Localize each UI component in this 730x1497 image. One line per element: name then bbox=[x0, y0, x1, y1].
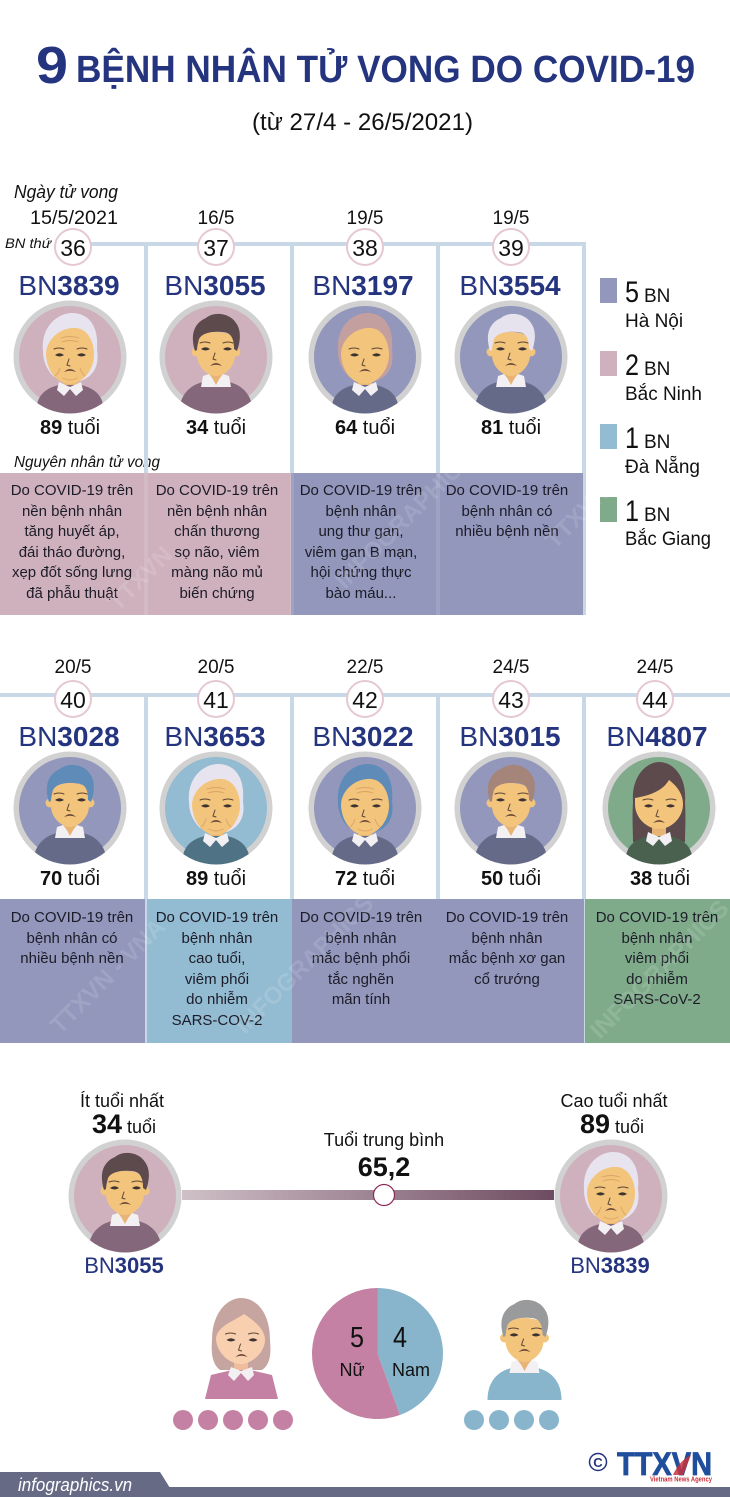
gender pie chart: 5 bbox=[350, 1322, 364, 1354]
average age: 65,2 bbox=[358, 1152, 410, 1182]
panel: cause BN3028 bbox=[0, 899, 145, 1043]
gender pie chart: 4 bbox=[393, 1322, 407, 1354]
watermarks: TTXVN bbox=[103, 542, 178, 616]
patient card 37: 34 tuổi bbox=[186, 417, 246, 439]
panel: cause BN3055: nền bệnh nhân bbox=[167, 503, 267, 520]
watermarks: INFOGRAPHICS bbox=[330, 445, 479, 594]
oldest patient: Cao tuổi nhất bbox=[560, 1091, 668, 1111]
youngest patient bbox=[68, 1091, 182, 1278]
gender pie chart: Nam bbox=[392, 1360, 430, 1380]
patient card 40: 20/5 bbox=[55, 657, 91, 678]
panel: cause BN3839: đã phẫu thuật bbox=[26, 585, 119, 602]
panel: cause BN3022: Do COVID-19 trên bbox=[300, 909, 422, 926]
patient card 43: BN3015 bbox=[459, 721, 561, 752]
panel: cause BN3197: bào máu... bbox=[326, 585, 396, 602]
legend item: Bắc Giang: BN bbox=[644, 505, 670, 526]
age bar bbox=[182, 1190, 554, 1200]
panel: cause BN3197: ung thư gan, bbox=[318, 523, 404, 540]
youngest patient: Ít tuổi nhất bbox=[80, 1091, 164, 1111]
patient card 38: 64 tuổi bbox=[335, 417, 395, 439]
panel: cause BN4807: bệnh nhân bbox=[622, 930, 692, 947]
patient card 37: BN3055 bbox=[164, 270, 266, 301]
patient card 41: BN3653 bbox=[164, 721, 266, 752]
panel: cause BN3055: sọ não, viêm bbox=[174, 544, 260, 561]
patient card 43: 50 tuổi bbox=[481, 868, 541, 890]
cause panels row 1 bbox=[0, 242, 586, 615]
panel: cause BN3022 bbox=[292, 899, 438, 1043]
patient card 37 bbox=[160, 208, 272, 439]
logo: TTXVN: TTXVN bbox=[617, 1446, 712, 1482]
legend item: Đà Nẵng: 1 bbox=[625, 422, 639, 455]
average age bbox=[324, 1130, 444, 1182]
panel: cause BN3028: nhiều bệnh nền bbox=[20, 950, 124, 967]
gender pie chart: Nữ bbox=[339, 1360, 365, 1380]
panel: cause BN3055: chấn thương bbox=[174, 523, 260, 540]
legend item: Bắc Ninh: 2 bbox=[625, 349, 639, 382]
panel: cause BN3653: cao tuổi, bbox=[189, 950, 245, 967]
patient card 36: 15/5/2021 bbox=[30, 208, 118, 229]
panel: cause BN4807: do nhiễm bbox=[626, 971, 688, 988]
legend item: Đà Nẵng: BN bbox=[644, 432, 670, 453]
panel: cause BN3839: tăng huyết áp, bbox=[24, 523, 120, 540]
panel: cause BN3028: bệnh nhân có bbox=[27, 930, 117, 947]
oldest patient bbox=[554, 1091, 668, 1278]
patient card 42: 72 tuổi bbox=[335, 868, 395, 890]
logo: TTXVN: C bbox=[593, 1455, 603, 1470]
panel: cause BN3653 bbox=[147, 899, 292, 1043]
panel: cause BN3197: bệnh nhân bbox=[326, 503, 396, 520]
legend item: Hà Nội: Hà Nội bbox=[625, 311, 683, 332]
patient card 44: 24/5 bbox=[637, 657, 673, 678]
panel: cause BN3839: đái tháo đường, bbox=[19, 544, 125, 561]
male count dots bbox=[464, 1410, 559, 1430]
panel: cause BN3197: Do COVID-19 trên bbox=[300, 482, 422, 499]
logo: TTXVN: Vietnam News Agency bbox=[650, 1474, 713, 1484]
panel: cause BN3554 bbox=[437, 473, 583, 615]
patient card 38 bbox=[308, 208, 422, 439]
patient card 42: 22/5 bbox=[347, 657, 383, 678]
patient card 40: BN3028 bbox=[18, 721, 120, 752]
oldest patient: 89 tuổi bbox=[580, 1109, 644, 1139]
patient card 36 bbox=[14, 208, 126, 439]
patient card 44: 44 bbox=[642, 687, 668, 713]
panel: cause BN3197: hội chứng thực bbox=[311, 564, 412, 581]
gender pie chart bbox=[312, 1288, 443, 1419]
panel: cause BN3839 bbox=[0, 473, 145, 615]
icon: female patient bbox=[205, 1298, 278, 1399]
legend item: Bắc Ninh: Bắc Ninh bbox=[625, 383, 702, 405]
legend item: Bắc Giang: Bắc Giang bbox=[625, 528, 711, 550]
panel: cause BN3055: biến chứng bbox=[179, 585, 255, 602]
oldest patient: BN3839 bbox=[570, 1253, 650, 1278]
axis caption: date of death: Ngày tử vong bbox=[14, 182, 118, 202]
panel: cause BN3055: màng não mủ bbox=[171, 564, 263, 581]
patient card 36: BN3839 bbox=[18, 270, 120, 301]
panel: cause BN3022: tắc nghẽn bbox=[328, 971, 394, 988]
age range chart bbox=[68, 1091, 668, 1278]
panel: cause BN3028: Do COVID-19 trên bbox=[11, 909, 133, 926]
patient card 42: BN3022 bbox=[312, 721, 414, 752]
watermarks: INFOGRAPHICS bbox=[230, 890, 379, 1039]
patient card 42: 42 bbox=[352, 687, 378, 713]
female count dots bbox=[173, 1410, 293, 1430]
panel: cause BN3653: bệnh nhân bbox=[182, 930, 252, 947]
legend item: Đà Nẵng: Đà Nẵng bbox=[625, 457, 700, 478]
panel: cause BN3022: mắc bệnh phổi bbox=[312, 950, 410, 967]
patient card 39: 39 bbox=[498, 235, 524, 261]
patient card 41 bbox=[160, 657, 272, 890]
cause panels row 2 bbox=[0, 693, 730, 1043]
panel: cause BN3653: do nhiễm bbox=[186, 991, 248, 1008]
panel: cause BN3015 bbox=[438, 899, 584, 1043]
panel: cause BN3197 bbox=[291, 473, 437, 615]
average marker bbox=[374, 1184, 394, 1206]
panel: cause BN3653: Do COVID-19 trên bbox=[156, 909, 278, 926]
patient card 38: 38 bbox=[352, 235, 378, 261]
icon: male patient bbox=[488, 1300, 562, 1400]
youngest patient: 34 tuổi bbox=[92, 1109, 156, 1139]
patient card 40 bbox=[14, 657, 126, 890]
panel: cause BN4807: SARS-CoV-2 bbox=[613, 991, 701, 1008]
panel: cause BN4807: Do COVID-19 trên bbox=[596, 909, 718, 926]
axis caption: patient order: BN thứ bbox=[5, 235, 52, 251]
panel: cause BN3554: Do COVID-19 trên bbox=[446, 482, 568, 499]
panel: cause BN3015: cổ trướng bbox=[474, 971, 540, 988]
panel: cause BN3015: mắc bệnh xơ gan bbox=[449, 950, 565, 967]
patient card 43: 43 bbox=[498, 687, 524, 713]
patient card 41: 20/5 bbox=[198, 657, 234, 678]
patient card 39: 19/5 bbox=[493, 208, 529, 229]
panel: cause BN3015: bệnh nhân bbox=[472, 930, 542, 947]
panel: cause BN3554: bệnh nhân có bbox=[462, 503, 552, 520]
patient card 41: 41 bbox=[203, 687, 229, 713]
patient card 37: 37 bbox=[203, 235, 229, 261]
patient card 36: 89 tuổi bbox=[40, 417, 100, 439]
patient card 39 bbox=[454, 208, 568, 439]
patient card 44: 38 tuổi bbox=[630, 868, 690, 890]
legend item: Bắc Giang bbox=[600, 495, 711, 550]
panel: cause BN3055 bbox=[145, 473, 291, 615]
title: BỆNH NHÂN TỬ VONG DO COVID-19 bbox=[76, 47, 695, 91]
legend item: Bắc Giang: 1 bbox=[625, 495, 639, 528]
panel: cause BN3022: bệnh nhân bbox=[326, 930, 396, 947]
patient card 44: BN4807 bbox=[606, 721, 708, 752]
panel: cause BN4807: viêm phổi bbox=[625, 950, 689, 967]
youngest patient: BN3055 bbox=[84, 1253, 164, 1278]
patient card 43: 24/5 bbox=[493, 657, 529, 678]
panel: cause BN4807 bbox=[585, 899, 730, 1043]
subtitle: date range: (từ 27/4 - 26/5/2021) bbox=[252, 109, 473, 136]
panel: cause BN3839: nền bệnh nhân bbox=[22, 503, 122, 520]
watermarks: TTXVN - VNA bbox=[45, 914, 171, 1039]
panel: cause BN3653: SARS-COV-2 bbox=[172, 1012, 262, 1029]
panel: cause BN3055: Do COVID-19 trên bbox=[156, 482, 278, 499]
footer band: infographics.vn bbox=[18, 1475, 132, 1495]
title: 9 bbox=[36, 37, 68, 95]
legend bbox=[600, 276, 711, 550]
panel: cause BN3653: viêm phổi bbox=[185, 971, 249, 988]
patient card 40: 70 tuổi bbox=[40, 868, 100, 890]
panel: cause BN3022: mãn tính bbox=[332, 991, 390, 1008]
axis caption: cause of death: Nguyên nhân tử vong bbox=[14, 454, 160, 471]
patient card 42 bbox=[308, 657, 422, 890]
watermarks bbox=[45, 445, 730, 1044]
logo: TTXVN bbox=[590, 1446, 713, 1484]
patient card 37: 16/5 bbox=[198, 208, 234, 229]
panel: cause BN3839: xẹp đốt sống lưng bbox=[12, 564, 132, 581]
title bbox=[36, 37, 695, 95]
panel: cause BN3197: viêm gan B mạn, bbox=[305, 544, 417, 561]
legend item: Bắc Ninh: BN bbox=[644, 359, 670, 380]
average age: Tuổi trung bình bbox=[324, 1130, 444, 1150]
patient card 39: BN3554 bbox=[459, 270, 561, 301]
patient card 36: 36 bbox=[60, 235, 86, 261]
legend item: Đà Nẵng bbox=[600, 422, 700, 478]
patient card 41: 89 tuổi bbox=[186, 868, 246, 890]
footer band bbox=[0, 1472, 730, 1497]
panel: cause BN3015: Do COVID-19 trên bbox=[446, 909, 568, 926]
legend item: Hà Nội: 5 bbox=[625, 276, 639, 309]
patient card 40: 40 bbox=[60, 687, 86, 713]
legend item: Bắc Ninh bbox=[600, 349, 702, 405]
patient card 38: 19/5 bbox=[347, 208, 383, 229]
legend item: Hà Nội: BN bbox=[644, 286, 670, 307]
watermarks: TTXVN bbox=[540, 480, 615, 554]
patient card 39: 81 tuổi bbox=[481, 417, 541, 439]
panel: cause BN3839: Do COVID-19 trên bbox=[11, 482, 133, 499]
patient card 44 bbox=[602, 657, 716, 890]
legend item: Hà Nội bbox=[600, 276, 683, 332]
patient card 38: BN3197 bbox=[312, 270, 414, 301]
patient card 43 bbox=[454, 657, 568, 890]
panel: cause BN3554: nhiều bệnh nền bbox=[455, 523, 559, 540]
watermarks: INFOGRAPHICS bbox=[585, 895, 730, 1044]
